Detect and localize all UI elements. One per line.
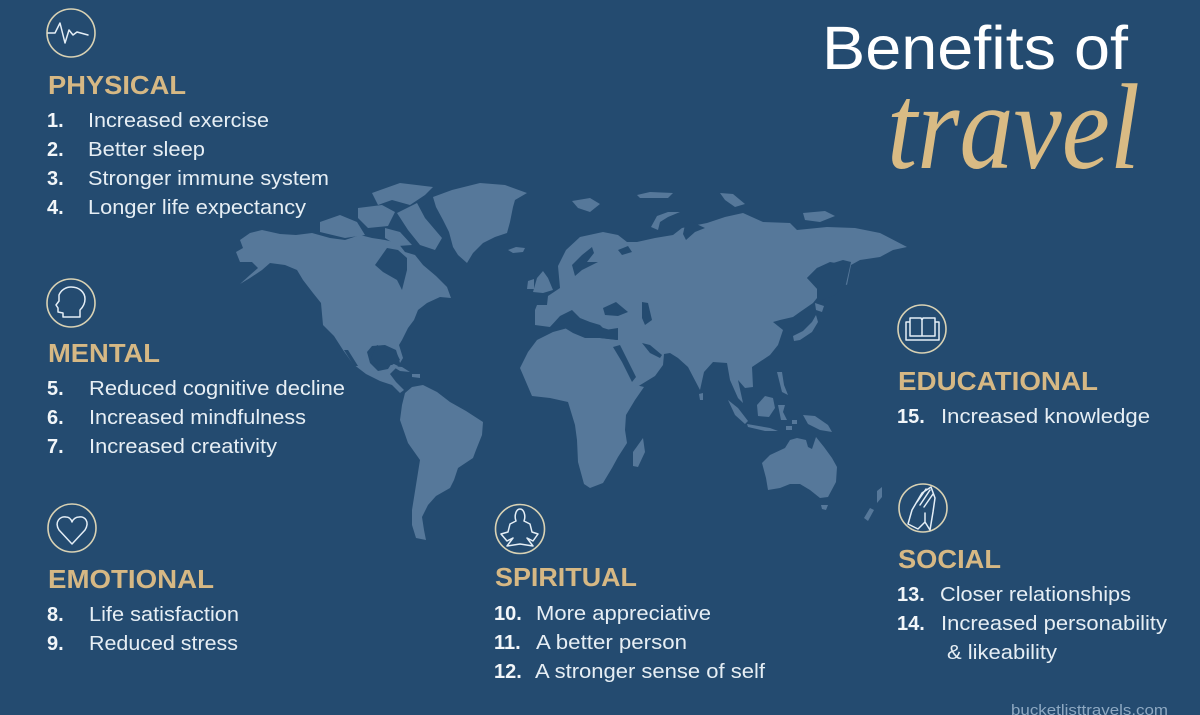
list: social benefits: & likeability — [947, 641, 1058, 664]
icon: praying hands — [899, 484, 947, 532]
list: educational benefits: 15. — [897, 406, 925, 428]
list: physical benefits — [47, 109, 329, 219]
heading: emotional: EMOTIONAL — [48, 564, 214, 594]
panel: social — [897, 484, 1168, 664]
list: physical benefits: Longer life expectancy — [88, 196, 307, 219]
panel: spiritual — [494, 504, 765, 683]
heading: physical: PHYSICAL — [48, 70, 186, 100]
panel: mental — [47, 279, 345, 458]
list: physical benefits: 2. — [47, 139, 64, 161]
heading: mental: MENTAL — [48, 338, 160, 368]
list: mental benefits: 5. — [47, 378, 64, 400]
heading: social: SOCIAL — [898, 544, 1001, 574]
list: emotional benefits — [47, 603, 239, 655]
list: physical benefits: 4. — [47, 197, 64, 219]
icon: heart — [48, 504, 96, 552]
panel: physical — [47, 9, 329, 219]
list: physical benefits: Increased exercise — [88, 109, 269, 132]
list: physical benefits: 1. — [47, 110, 64, 132]
list: social benefits: 13. — [897, 584, 925, 606]
title — [822, 14, 1140, 195]
list: spiritual benefits: 12. — [494, 661, 522, 683]
list: social benefits — [897, 583, 1168, 664]
list: spiritual benefits: More appreciative — [536, 602, 711, 625]
list: mental benefits: 7. — [47, 436, 64, 458]
list: emotional benefits: 9. — [47, 633, 64, 655]
list: physical benefits: Stronger immune system — [88, 167, 329, 190]
title: Benefits of — [822, 14, 1129, 82]
list: educational benefits: Increased knowledge — [941, 405, 1150, 428]
panel: emotional — [47, 504, 239, 655]
list: social benefits: 14. — [897, 613, 925, 635]
list: mental benefits: Reduced cognitive decline — [89, 377, 345, 400]
list: physical benefits: Better sleep — [88, 138, 205, 161]
list: mental benefits: Increased creativity — [89, 435, 278, 458]
panel: educational — [897, 305, 1150, 428]
icon: meditation — [496, 504, 544, 554]
list: spiritual benefits: 11. — [494, 632, 521, 654]
list: social benefits: Increased personability — [941, 612, 1168, 635]
list: emotional benefits: Reduced stress — [89, 632, 238, 655]
heading: educational: EDUCATIONAL — [898, 366, 1098, 396]
icon: heartbeat — [47, 9, 95, 57]
list: emotional benefits: 8. — [47, 604, 64, 626]
list: physical benefits: 3. — [47, 168, 64, 190]
list: spiritual benefits — [494, 602, 765, 683]
list: spiritual benefits: A stronger sense of self — [535, 660, 765, 683]
list: social benefits: Closer relationships — [940, 583, 1131, 606]
heading: spiritual: SPIRITUAL — [495, 562, 637, 592]
list: spiritual benefits: A better person — [536, 631, 687, 654]
list: spiritual benefits: 10. — [494, 603, 522, 625]
icon: open book — [898, 305, 946, 353]
world map — [236, 183, 907, 540]
icon: head — [47, 279, 95, 327]
list: mental benefits: 6. — [47, 407, 64, 429]
list: mental benefits — [47, 377, 345, 458]
list: emotional benefits: Life satisfaction — [89, 603, 239, 626]
title: travel — [887, 60, 1140, 195]
list: mental benefits: Increased mindfulness — [89, 406, 306, 429]
